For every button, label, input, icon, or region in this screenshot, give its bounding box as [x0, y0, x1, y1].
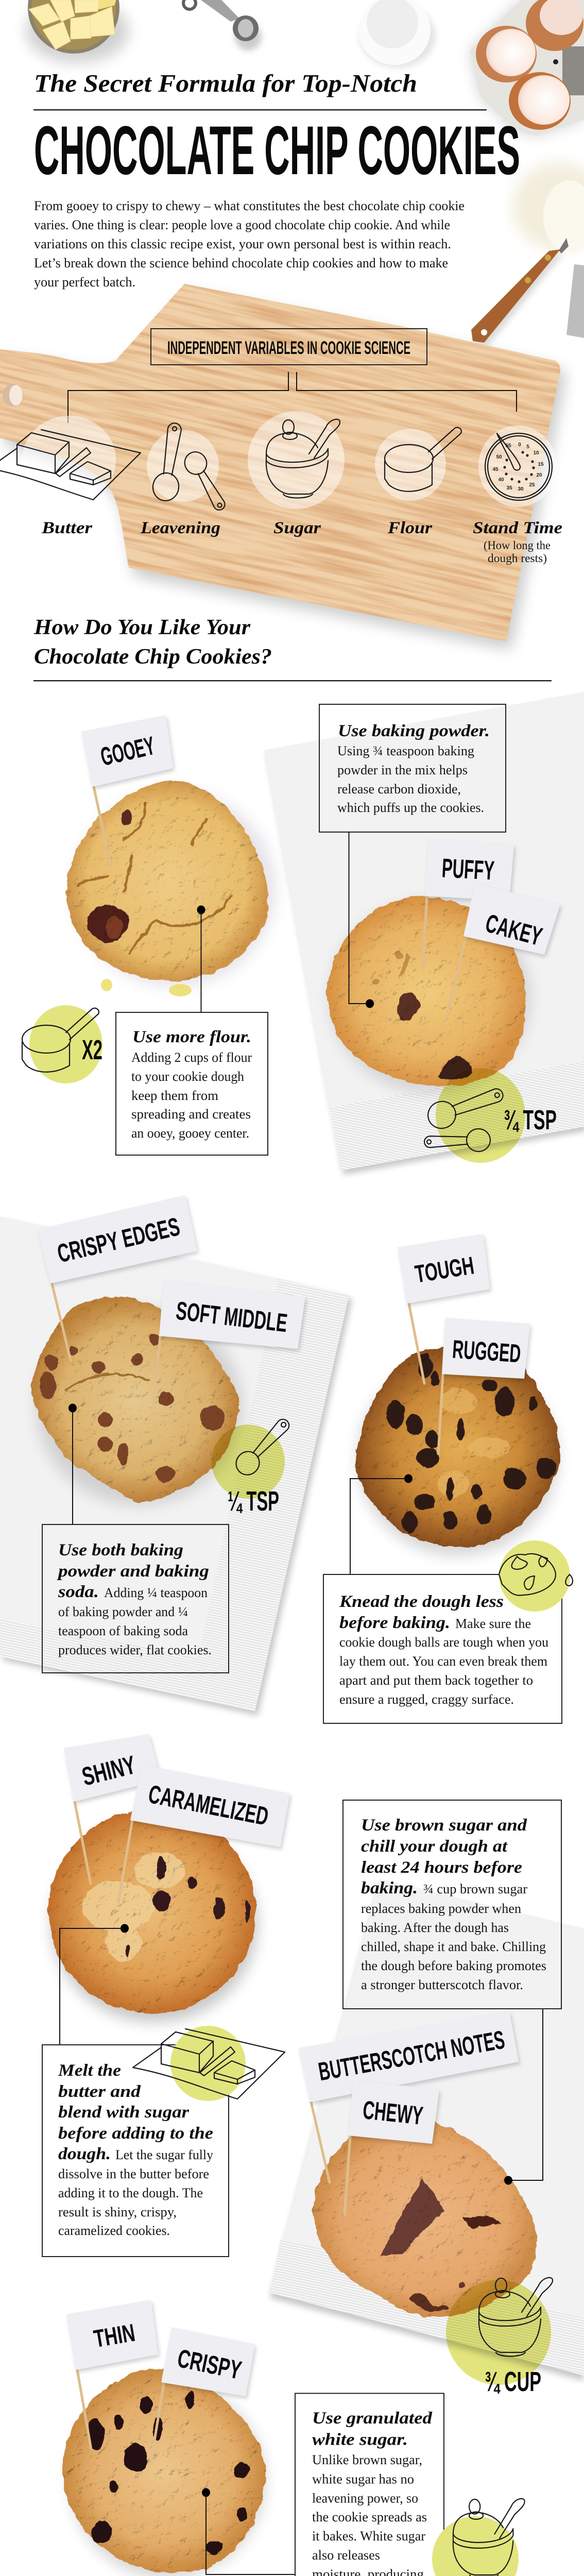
callout dot and line [202, 2488, 295, 2574]
flag: crispy edges: CRISPY EDGES [55, 1212, 182, 1268]
text box: brown sugar: ¾ cup brown sugar [423, 1882, 527, 1896]
text box: use baking powder: release carbon dioxide, [337, 782, 461, 796]
text box: use both: Use both baking [58, 1541, 183, 1560]
photo: caramelized cookie [48, 1809, 256, 2013]
photo: crispy cookie [62, 2369, 265, 2572]
icon: timer dial: 0 [518, 442, 521, 448]
napkin [0, 1216, 349, 1711]
text box: brown sugar: the dough before baking promotes [361, 1958, 546, 1973]
icon: sugar bowl three quarter cup [446, 2278, 553, 2397]
callout dot and line [60, 1924, 129, 2045]
variable: butter [0, 416, 141, 537]
intro paragraph [34, 198, 465, 290]
icon: spoon quarter teaspoon [212, 1413, 295, 1517]
text box: knead less: lay them out. You can even break them [339, 1654, 547, 1669]
photo: measuring cup edge [566, 264, 584, 338]
text box: melt butter: butter and [58, 2082, 141, 2101]
text box: melt butter: Let the sugar fully [115, 2147, 213, 2162]
icon: flour cup x2 [22, 1005, 102, 1083]
text box: knead less: apart and put them back together to [339, 1673, 533, 1688]
text box: brown sugar: chilled, shape it and bake. Chilling [361, 1939, 546, 1954]
icon: flour cup x2: X2 [82, 1035, 102, 1065]
text box: melt butter: dough. [58, 2145, 111, 2163]
text box: knead less: cookie dough balls are tough when you [339, 1635, 548, 1650]
icon: timer dial: 50 [496, 454, 502, 460]
text box: granulated white sugar: white sugar has no [312, 2472, 414, 2486]
variable: butter: Butter [41, 519, 93, 537]
intro paragraph: From gooey to crispy to chewy – what constitutes the best chocolate chip cookie [34, 198, 465, 213]
photo: butter in measuring cup [26, 0, 129, 63]
flag: thin: THIN [92, 2319, 137, 2353]
icon: timer dial: 35 [506, 485, 512, 491]
flag: soft middle [152, 1280, 305, 1411]
callout line and dot [504, 2009, 543, 2184]
flag: caramelized: CARAMELIZED [146, 1780, 271, 1831]
text box: brown sugar: replaces baking powder when [361, 1901, 521, 1916]
text box: use more flour: spreading and creates [131, 1107, 251, 1122]
flag: crispy [151, 2327, 255, 2463]
flag: chewy: CHEWY [362, 2095, 424, 2130]
icon: timer dial: 20 [536, 472, 542, 478]
photo: flour pile [512, 162, 584, 252]
panel: cutting board of independent variables [0, 284, 571, 654]
text box: use both: of baking powder and ¼ [58, 1604, 188, 1619]
text box: melt butter: blend with sugar [58, 2103, 190, 2122]
text box: use baking powder [319, 704, 506, 832]
flag: gooey: GOOEY [98, 731, 158, 771]
text box: brown sugar: a stronger butterscotch flavor. [361, 1977, 523, 1992]
variable: leavening [140, 421, 231, 537]
intro paragraph: Let’s break down the science behind chocolate chip cookies and how to make [34, 256, 448, 270]
panel: thin crispy cookie [62, 2300, 525, 2576]
icon: spoons three quarter teaspoon [424, 1068, 557, 1163]
text box: use baking powder: powder in the mix helps [337, 762, 468, 777]
flag: tough: TOUGH [413, 1252, 476, 1289]
icon: butter [133, 2026, 285, 2101]
text box: use baking powder: which puffs up the cookies. [337, 800, 484, 815]
variable: leavening: Leavening [140, 519, 220, 537]
text box: brown sugar [343, 1800, 561, 2009]
intro paragraph: your perfect batch. [34, 275, 135, 290]
text box: use baking powder: Use baking powder. [338, 722, 490, 740]
variable: sugar [248, 411, 345, 537]
icon: timer dial: 15 [538, 462, 544, 467]
napkin [264, 692, 584, 1171]
callout dot and line [68, 1403, 77, 1524]
text box: melt butter: Melt the [58, 2061, 121, 2080]
heading: how do you like your cookies: Chocolate Chip Cookies? [34, 645, 272, 669]
text box: melt butter: dissolve in the butter before [58, 2166, 209, 2181]
flag: crispy edges [38, 1195, 197, 1360]
text box: brown sugar: baking. After the dough has [361, 1920, 509, 1935]
text box: use both: Adding ¼ teaspoon [104, 1585, 208, 1600]
flag: cakey: CAKEY [483, 909, 545, 951]
flag: crispy: CRISPY [175, 2344, 244, 2385]
variable: stand time [473, 426, 562, 565]
text box: knead less [323, 1574, 562, 1723]
flag: caramelized [118, 1765, 290, 1902]
text box: granulated white sugar: also releases [312, 2548, 380, 2563]
text box: brown sugar: baking. [361, 1879, 418, 1897]
flag: soft middle: SOFT MIDDLE [175, 1296, 289, 1337]
text box: melt butter: result is shiny, crispy, [58, 2205, 177, 2219]
callout line and dot [349, 832, 374, 1008]
text box: granulated white sugar: Unlike brown sugar, [312, 2452, 422, 2467]
text box: use more flour: keep them from [131, 1088, 218, 1103]
flag: gooey [81, 715, 173, 866]
variable: stand time: (How long the [484, 539, 551, 552]
intro paragraph: varies. One thing is clear: people love a good chocolate chip cookie. And while [34, 217, 450, 232]
text box: melt butter: adding it to the dough. The [58, 2185, 203, 2200]
text box: use baking powder: Using ¾ teaspoon baking [337, 743, 474, 758]
icon: timer dial: 5 [526, 444, 529, 450]
flag: thin [66, 2300, 158, 2449]
icon: sugar bowl [432, 2499, 525, 2576]
icon: timer dial: 30 [518, 486, 524, 492]
text box: granulated white sugar: leavening power, so [312, 2490, 418, 2506]
text box: granulated white sugar: Use granulated [312, 2409, 433, 2428]
text box: use more flour: to your cookie dough [131, 1069, 244, 1084]
icon: timer dial: 55 [505, 443, 511, 449]
photo: chewy cookie [313, 2115, 537, 2317]
panel: puffy cakey cookie on napkin [264, 692, 584, 1175]
flag: tough [398, 1234, 490, 1383]
title: eyebrow: The Secret Formula for Top-Notch [34, 69, 417, 97]
text box: use more flour: an ooey, gooey center. [131, 1126, 249, 1141]
icon: timer dial: 25 [529, 482, 535, 488]
photo: measuring spoon [183, 0, 262, 50]
panel: crispy edges soft middle cookie on napkin [0, 1195, 352, 1716]
text box: granulated white sugar [295, 2394, 444, 2576]
text box: use both: powder and baking [57, 1562, 209, 1581]
text box: brown sugar: least 24 hours before [361, 1858, 522, 1877]
text box: granulated white sugar: the cookie spreads as [312, 2510, 427, 2524]
photo: bowl of sugar [358, 0, 436, 68]
text box: knead less: ensure a rugged, craggy surface. [339, 1692, 514, 1707]
photo: eggshells in carton [470, 0, 584, 135]
napkin [270, 1879, 584, 2376]
icon: timer dial [485, 433, 552, 500]
icon: sugar bowl three quarter cup: ¾ CUP [485, 2366, 541, 2397]
flag: shiny [64, 1734, 161, 1884]
callout dot and line [197, 906, 205, 1012]
icon: timer dial: 40 [498, 477, 504, 483]
text box: use more flour [116, 1012, 268, 1155]
panel: butterscotch chewy cookie on napkin [270, 1800, 584, 2397]
icon: cookie dough ball [499, 1540, 573, 1612]
flag: rugged: RUGGED [452, 1334, 522, 1368]
text box: knead less: before baking. [339, 1614, 450, 1632]
text box: granulated white sugar: white sugar. [312, 2431, 408, 2449]
photo: crispy edge cookie [31, 1297, 239, 1502]
text box: melt butter [42, 2045, 229, 2257]
callout dot and line [350, 1475, 413, 1574]
text box: use both: soda. [58, 1583, 99, 1601]
text box: knead less: Make sure the [455, 1616, 531, 1631]
heading box: independent variables: INDEPENDENT VARIABLES IN COOKIE SCIENCE [167, 338, 410, 358]
text box: melt butter: before adding to the [58, 2124, 213, 2143]
panel: shiny caramelized cookie [42, 1734, 290, 2257]
text box: melt butter: caramelized cookies. [58, 2223, 170, 2238]
text box: use more flour: Use more flour. [132, 1028, 251, 1046]
icon: timer dial: 10 [533, 450, 539, 456]
flag: chewy [345, 2080, 439, 2214]
variable: stand time: dough rests) [488, 552, 547, 565]
flag: shiny: SHINY [79, 1750, 139, 1791]
text box: brown sugar: Use brown sugar and [361, 1816, 527, 1835]
text box: knead less: Knead the dough less [339, 1592, 504, 1611]
heading box: independent variables [151, 329, 427, 365]
variable: sugar: Sugar [273, 519, 321, 537]
photo: rugged cookie [355, 1347, 560, 1548]
top ingredient photos [26, 0, 584, 347]
panel: gooey cookie [22, 715, 276, 1155]
text box: granulated white sugar: it bakes. White sugar [312, 2529, 425, 2544]
flag: cakey [447, 884, 560, 1015]
panel: tough rugged cookie [323, 1234, 573, 1723]
flag: puffy: PUFFY [441, 853, 495, 886]
text box: use both [42, 1524, 229, 1673]
flag: butterscotch notes [299, 2011, 519, 2182]
text box: use both: teaspoon of baking soda [58, 1623, 188, 1638]
photo: puffy cookie [328, 897, 526, 1086]
variable: flour: Flour [387, 519, 433, 537]
variable: flour [375, 428, 461, 537]
flag: puffy [423, 839, 514, 970]
icon: spoon quarter teaspoon: ¼ TSP [228, 1486, 279, 1517]
intro paragraph: variations on this classic recipe exist, your own personal best is within reach. [34, 236, 451, 251]
heading: how do you like your cookies: How Do You Like Your [33, 616, 251, 639]
photo: wooden-handled knife [471, 238, 569, 347]
variable: stand time: Stand Time [473, 519, 562, 537]
flag: rugged [438, 1318, 530, 1454]
icon: timer dial: 45 [492, 467, 499, 472]
photo: gooey cookie [66, 781, 268, 981]
text box: use more flour: Adding 2 cups of flour [131, 1050, 252, 1065]
heading: how do you like your cookies [33, 616, 552, 681]
text box: brown sugar: chill your dough at [361, 1837, 508, 1856]
text box: use both: produces wider, flat cookies. [58, 1642, 212, 1657]
